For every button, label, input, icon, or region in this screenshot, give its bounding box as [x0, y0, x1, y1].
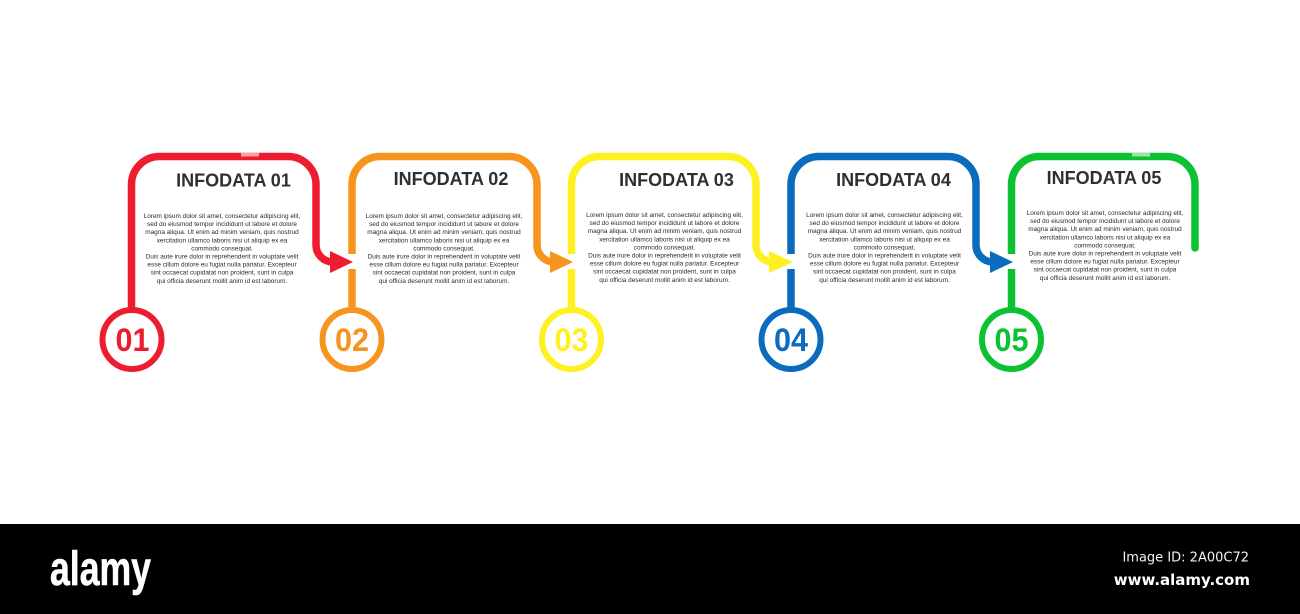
number badge: 02: 02: [335, 322, 369, 358]
text block: infodata 05: qui officia deserunt mollit anim id est laborum.: [1040, 275, 1170, 282]
text block: infodata 01: xercitation ullamco laboris nisi ut aliquip ex ea: [157, 237, 288, 244]
text block: infodata 02: Lorem ipsum dolor sit amet, consectetur adipiscing elit,: [366, 213, 523, 220]
image id: Image ID: 2A00C72: [1122, 550, 1249, 566]
text block: infodata 04: sint occaecat cupidatat non proident, sunt in culpa: [813, 269, 956, 276]
text block: infodata 05: Duis aute irure dolor in reprehenderit in voluptate velit: [1029, 250, 1182, 258]
number badge: 03: 03: [554, 322, 588, 358]
arrow: yellow: [769, 251, 793, 273]
text block: infodata 03: sint occaecat cupidatat non proident, sunt in culpa: [593, 269, 736, 276]
text block: infodata 05: sint occaecat cupidatat non proident, sunt in culpa: [1034, 267, 1177, 274]
text block: infodata 04: xercitation ullamco laboris nisi ut aliquip ex ea: [819, 236, 950, 243]
text block: infodata 01: sint occaecat cupidatat non proident, sunt in culpa: [151, 270, 294, 277]
number badge: 03: [542, 310, 601, 369]
connector line: blue: [791, 156, 993, 312]
number badge: 05: 05: [994, 322, 1028, 358]
text block: infodata 02: sed do eiusmod tempor incididunt ut labore et dolore: [369, 221, 519, 228]
text block: infodata 03: magna aliqua. Ut enim ad minim veniam, quis nostrud: [588, 228, 742, 235]
connector line: green: [1012, 156, 1195, 312]
text block: infodata 03: qui officia deserunt mollit anim id est laborum.: [599, 277, 730, 284]
panel: infodata 02: [322, 156, 573, 369]
text block: infodata 05: esse cillum dolore eu fugiat nulla pariatur. Excepteur: [1030, 259, 1180, 266]
connector line: orange: [352, 156, 554, 312]
text block: infodata 04: Lorem ipsum dolor sit amet, consectetur adipiscing elit,: [806, 212, 963, 219]
text block: infodata 05: magna aliqua. Ut enim ad minim veniam, quis nostrud: [1028, 226, 1182, 233]
text block: infodata 01: sed do eiusmod tempor incididunt ut labore et dolore: [147, 221, 297, 228]
heading: infodata 04: INFODATA 04: [836, 170, 951, 190]
text block: infodata 04: commodo consequat.: [854, 244, 915, 251]
text block: infodata 02: xercitation ullamco laboris nisi ut aliquip ex ea: [379, 237, 510, 244]
text block: infodata 04: sed do eiusmod tempor incididunt ut labore et dolore: [810, 220, 960, 227]
connector line: yellow: [572, 156, 773, 312]
logo: alamy: alamy: [50, 543, 151, 596]
panel: infodata 04: [762, 156, 1013, 369]
text block: infodata 01: qui officia deserunt mollit anim id est laborum.: [157, 278, 287, 285]
text block: infodata 02: magna aliqua. Ut enim ad minim veniam, quis nostrud: [367, 229, 521, 236]
text block: infodata 02: Duis aute irure dolor in reprehenderit in voluptate velit: [368, 254, 521, 260]
text block: infodata 02: commodo consequat.: [413, 245, 475, 252]
panel: infodata 05: [982, 152, 1199, 369]
text block: infodata 02: esse cillum dolore eu fugiat nulla pariatur. Excepteur: [369, 262, 519, 269]
text block: infodata 01: commodo consequat.: [191, 245, 253, 252]
worn patch: green top edge: [1132, 152, 1150, 156]
text block: infodata 02: qui officia deserunt mollit anim id est laborum.: [379, 278, 509, 285]
number badge: 02: [322, 310, 382, 369]
heading: infodata 05: INFODATA 05: [1047, 168, 1161, 188]
number badge: 04: 04: [774, 322, 808, 358]
text block: infodata 04: magna aliqua. Ut enim ad minim veniam, quis nostrud: [808, 228, 962, 235]
text block: infodata 03: Lorem ipsum dolor sit amet, consectetur adipiscing elit,: [586, 212, 743, 219]
panel: infodata 01: [102, 152, 353, 369]
text block: infodata 01: Duis aute irure dolor in reprehenderit in voluptate velit: [146, 254, 299, 260]
website: www.alamy.com: [1114, 571, 1250, 589]
text block: infodata 02: sint occaecat cupidatat non proident, sunt in culpa: [373, 270, 516, 277]
number badge: 04: [762, 310, 820, 369]
line end cap: [1191, 244, 1199, 252]
number badge: 01: 01: [116, 322, 150, 358]
text block: infodata 05: xercitation ullamco laboris nisi ut aliquip ex ea: [1040, 234, 1171, 241]
number badge: 01: [102, 310, 162, 369]
text block: infodata 04: esse cillum dolore eu fugiat nulla pariatur. Excepteur: [810, 261, 960, 268]
text block: infodata 03: esse cillum dolore eu fugiat nulla pariatur. Excepteur: [590, 261, 740, 268]
heading: infodata 03: INFODATA 03: [619, 170, 734, 190]
arrow: red: [330, 251, 353, 273]
text block: infodata 01: Lorem ipsum dolor sit amet, consectetur adipiscing elit,: [144, 213, 301, 220]
text block: infodata 03: xercitation ullamco laboris nisi ut aliquip ex ea: [599, 236, 730, 243]
text block: infodata 04: qui officia deserunt mollit anim id est laborum.: [819, 277, 950, 284]
text block: infodata 03: sed do eiusmod tempor incididunt ut labore et dolore: [590, 220, 740, 227]
text block: infodata 03: commodo consequat.: [634, 244, 695, 251]
text block: infodata 05: sed do eiusmod tempor incididunt ut labore et dolore: [1030, 218, 1180, 225]
number badge: 05: [982, 310, 1041, 369]
arrow: orange: [550, 251, 573, 273]
heading: infodata 02: INFODATA 02: [394, 169, 508, 189]
text block: infodata 04: Duis aute irure dolor in reprehenderit in voluptate velit: [808, 252, 961, 260]
heading: infodata 01: INFODATA 01: [176, 170, 291, 190]
panel: infodata 03: [542, 156, 793, 369]
arrow: blue: [990, 251, 1013, 273]
text block: infodata 03: Duis aute irure dolor in reprehenderit in voluptate velit: [588, 252, 741, 260]
text block: infodata 01: magna aliqua. Ut enim ad minim veniam, quis nostrud: [145, 229, 299, 236]
connector line: red: [132, 156, 333, 312]
text block: infodata 01: esse cillum dolore eu fugiat nulla pariatur. Excepteur: [147, 262, 297, 269]
text block: infodata 05: commodo consequat.: [1074, 242, 1136, 249]
footer band: [0, 524, 1300, 614]
worn patch: red top edge: [241, 152, 259, 156]
text block: infodata 05: Lorem ipsum dolor sit amet, consectetur adipiscing elit,: [1027, 210, 1184, 217]
